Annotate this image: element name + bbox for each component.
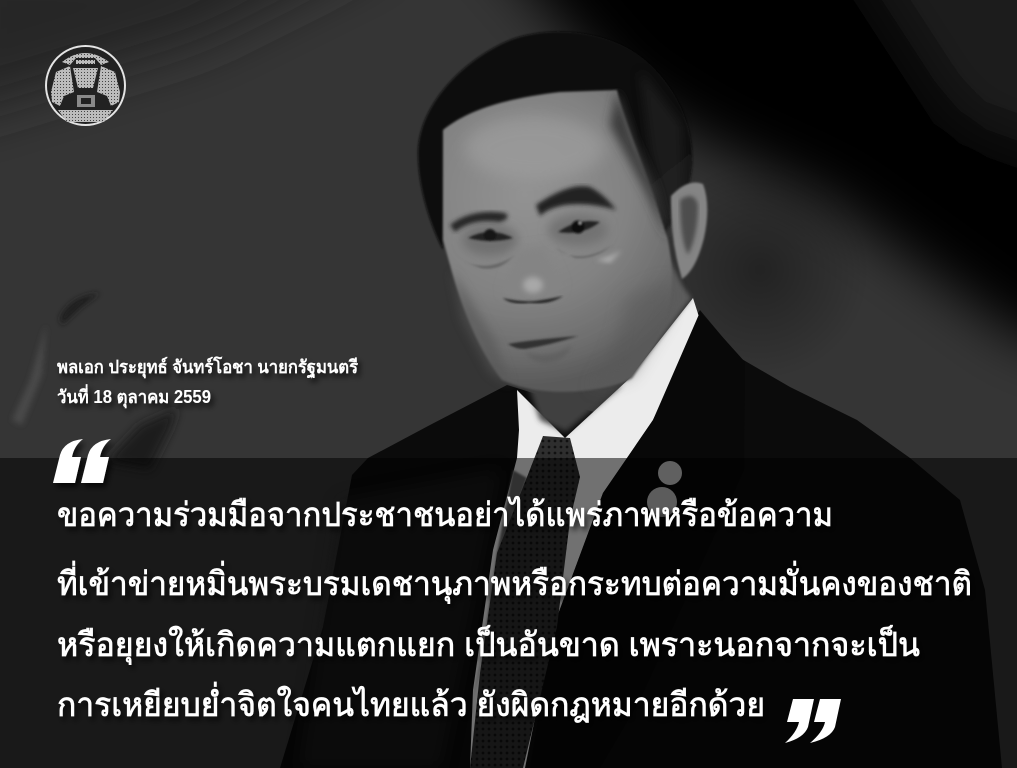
quote line 4: การเหยียบย่ำจิตใจคนไทยแล้ว ยังผิดกฎหมายอีกด้วย [57, 682, 765, 723]
closing quotation mark [785, 699, 841, 743]
suit lower sheen [300, 470, 500, 768]
mouth [508, 336, 578, 364]
translucent caption band [0, 458, 1017, 768]
nose [503, 245, 563, 303]
hair [418, 32, 692, 250]
lapel highlight [473, 470, 527, 700]
quote line 2: ที่เข้าข่ายหมิ่นพระบรมเดชานุภาพหรือกระทบต่อความมั่นคงของชาติ [57, 561, 972, 604]
date: วันที่ 18 ตุลาคม 2559 [57, 384, 211, 409]
portrait [280, 32, 1002, 768]
face [443, 90, 672, 392]
shirt collar [470, 298, 700, 768]
right eyebrow [536, 186, 616, 216]
neck shadow [528, 385, 622, 432]
emblem: cabinet seal [45, 45, 126, 126]
quote text [57, 496, 972, 723]
necktie [470, 436, 580, 768]
speaker name and date [57, 356, 358, 409]
speaker name: พลเอก ประยุทธ์ จันทร์โอชา นายกรัฐมนตรี [57, 356, 358, 379]
jacket lapel right [530, 312, 745, 768]
ear [671, 182, 707, 279]
right eye socket [548, 214, 608, 246]
quote line 1: ขอความร่วมมือจากประชาชนอย่าได้แพร่ภาพหรือข้อความ [57, 496, 833, 533]
left eye socket [462, 224, 518, 256]
suit jacket [280, 310, 1002, 768]
quote line 3: หรือยุยงให้เกิดความแตกแยก เป็นอันขาด เพราะนอกจากจะเป็น [57, 625, 920, 665]
lapel pins [658, 461, 682, 485]
hair sheen [640, 70, 684, 228]
hairline shadow [610, 90, 668, 240]
left eye [465, 229, 515, 269]
right eye [555, 220, 622, 263]
opening quotation mark [53, 439, 111, 483]
left eyebrow [450, 212, 508, 232]
neck [505, 230, 691, 392]
cheek shading [590, 280, 670, 390]
forehead highlight [465, 116, 605, 180]
